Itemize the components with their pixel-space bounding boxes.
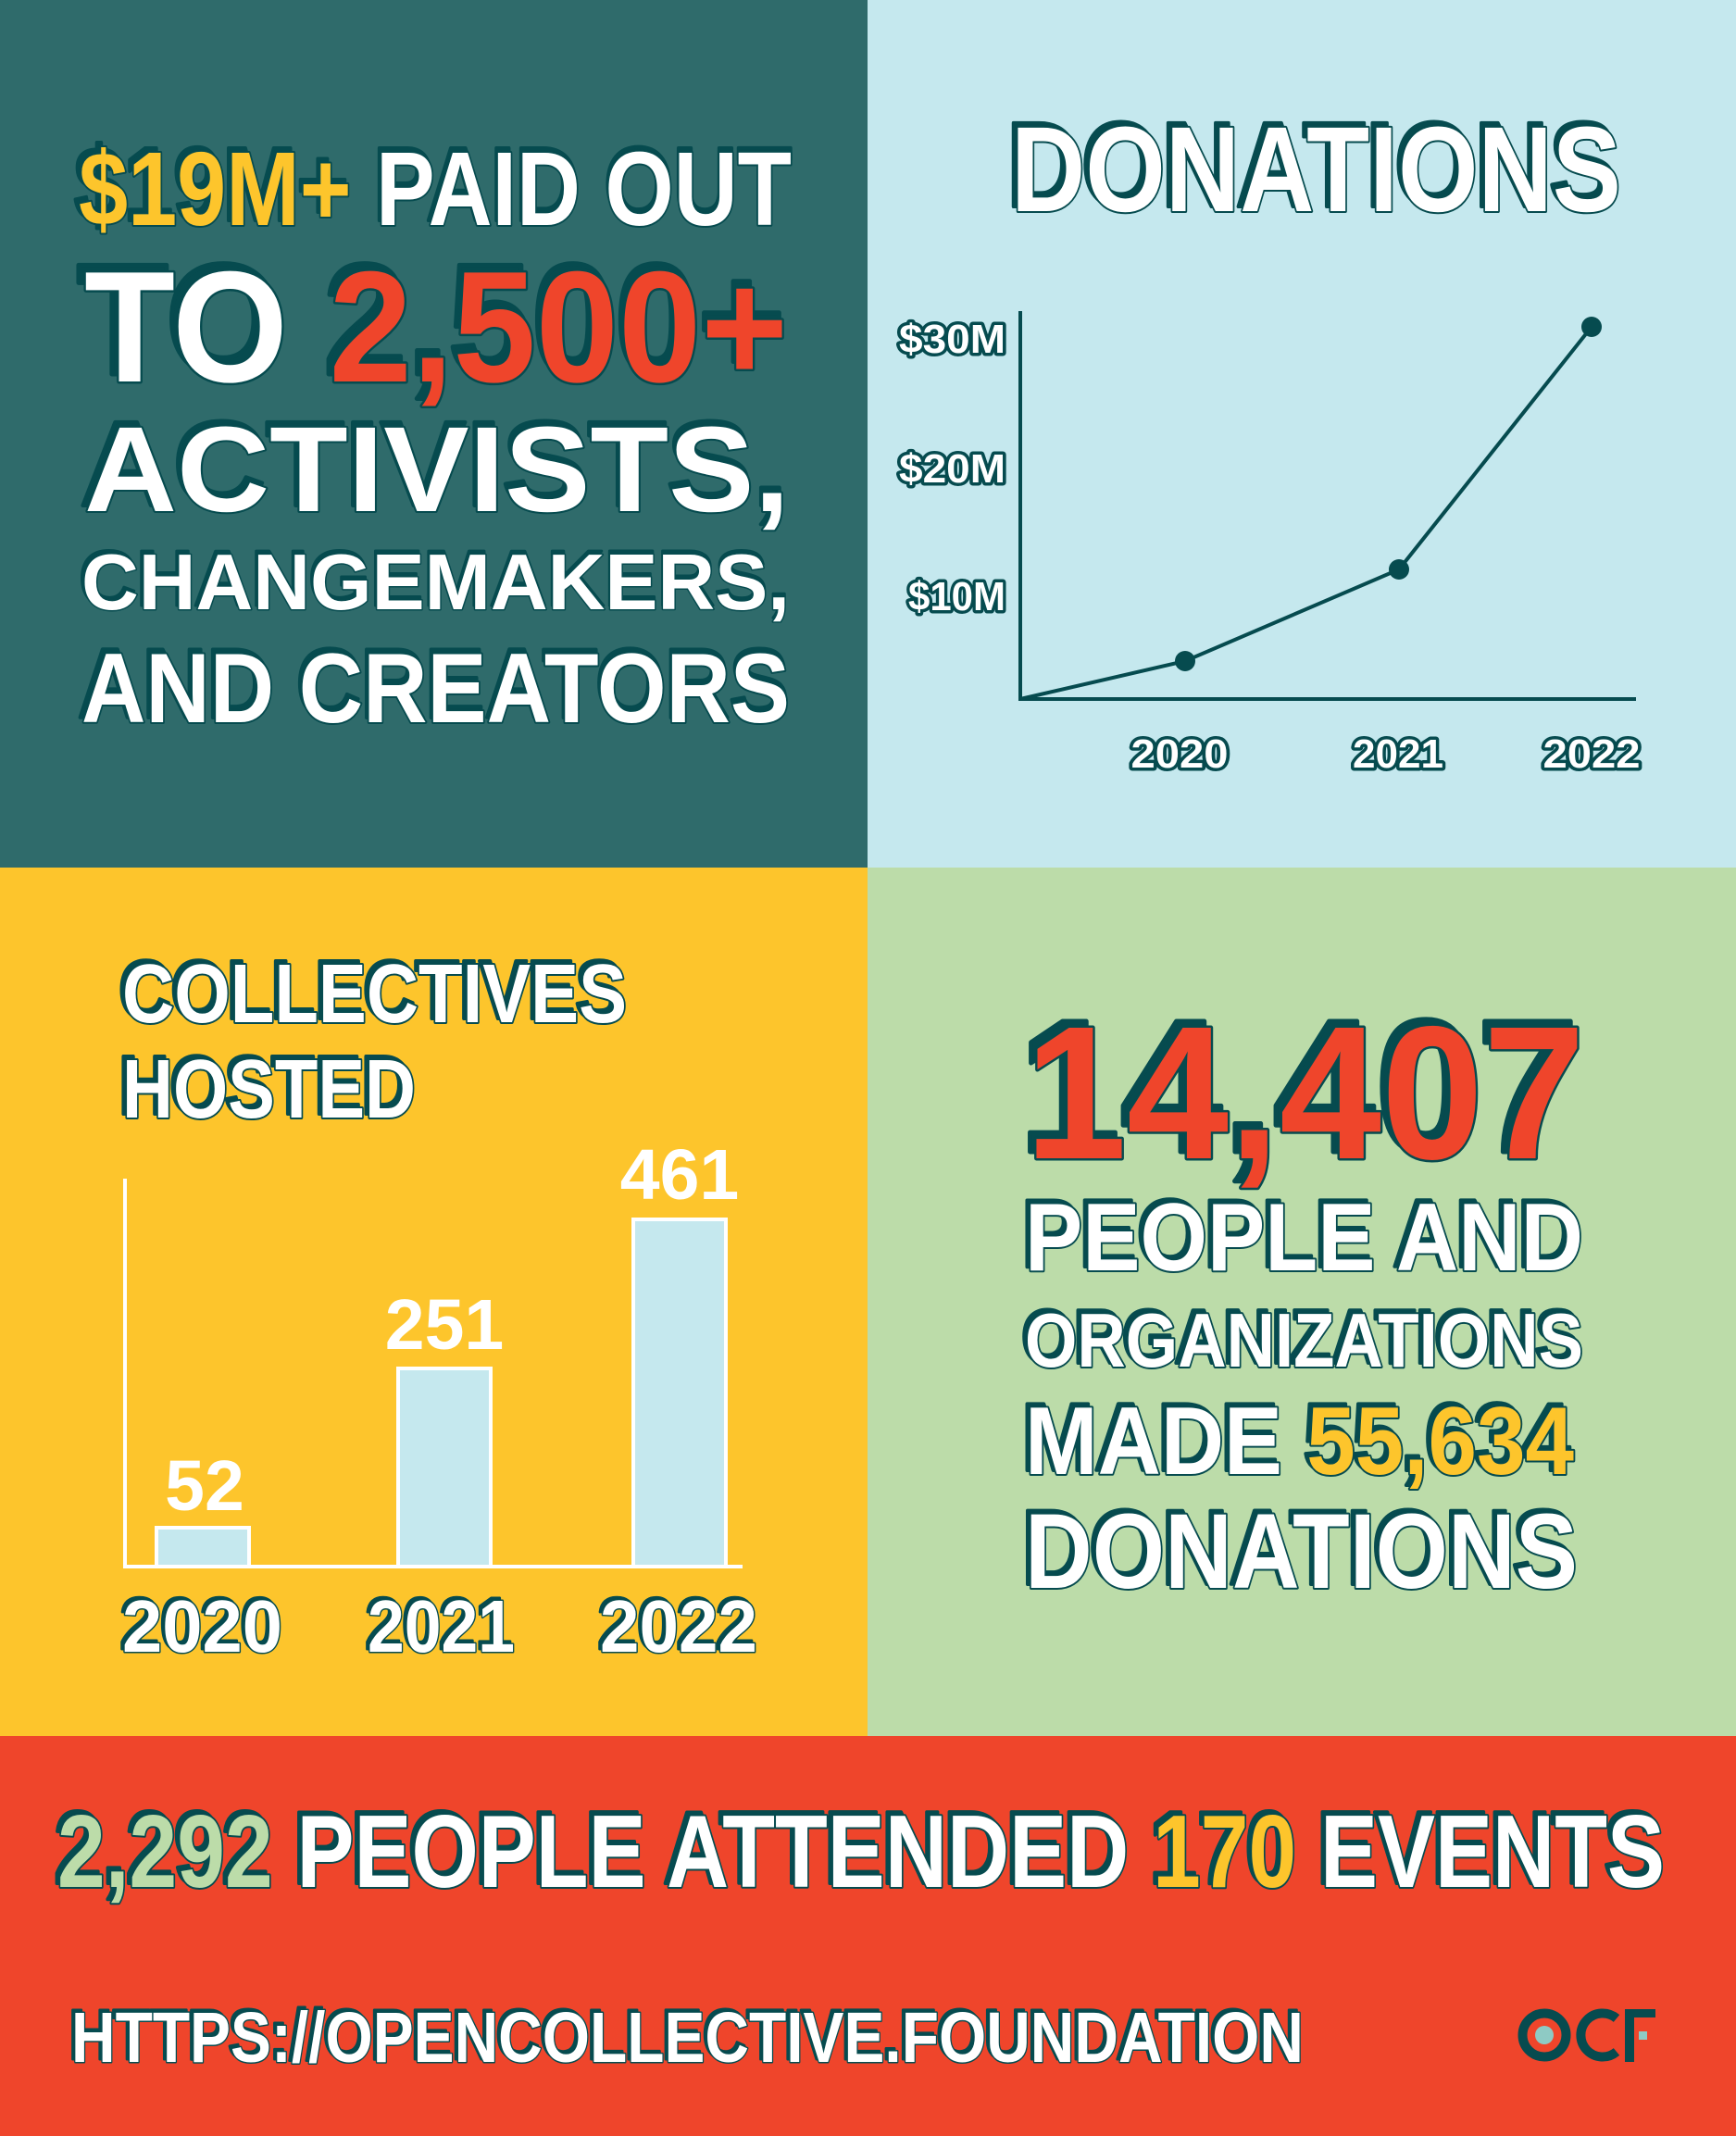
bar chart: collectives: 251 (385, 1285, 504, 1365)
line chart: donations: $30M (899, 317, 1005, 362)
text: people and organizations made donations: PEOPLE AND (1021, 1180, 1580, 1288)
events banner text: 2,292 PEOPLE ATTENDED 170 EVENTS (57, 1794, 1665, 1909)
headline: to 2,500+: TO 2,500+ (77, 231, 785, 408)
headline: to 2,500+: TO 2,500+ (84, 239, 788, 416)
panel: donations chart (868, 0, 1736, 868)
line chart: donations: 2021 (1353, 731, 1443, 777)
title: donations: DONATIONS (1011, 101, 1621, 237)
title: collectives hosted: HOSTED (122, 1043, 416, 1136)
headline: activists: ACTIVISTS, (84, 401, 790, 537)
headline: changemakers: CHANGEMAKERS, (79, 535, 790, 623)
panel: paid out (0, 0, 868, 868)
logo: OCF (1522, 2009, 1655, 2062)
line chart: donations: $20M (899, 446, 1005, 492)
bar chart: collectives: 52 (165, 1446, 244, 1526)
bar chart: collectives: 2022 (597, 1582, 755, 1665)
bar chart: collectives: 2021 (365, 1582, 512, 1665)
bar chart: collectives: 461 (620, 1135, 739, 1215)
title: collectives hosted: HOSTED (119, 1040, 412, 1132)
text: people and organizations made donations: DONATIONS (1025, 1493, 1578, 1611)
big number: 14,407: 14,407 (1025, 987, 1585, 1199)
bar chart: collectives (119, 1135, 757, 1668)
bar chart: collectives: 2020 (122, 1585, 282, 1668)
bar chart: collectives: 2022 (600, 1585, 757, 1668)
text: people and organizations made donations (1021, 1180, 1583, 1611)
title: donations: DONATIONS (1006, 96, 1617, 232)
line chart: donations: $10M (908, 574, 1005, 619)
line chart: donations: 2022 (1542, 731, 1641, 777)
url: HTTPS://OPENCOLLECTIVE.FOUNDATION (69, 1995, 1301, 2075)
title: collectives hosted: COLLECTIVES (119, 944, 623, 1037)
headline: activists: ACTIVISTS, (80, 395, 788, 531)
title: collectives hosted: COLLECTIVES (122, 948, 627, 1041)
line chart: donations (899, 311, 1641, 777)
panel: people and organizations (868, 868, 1736, 1736)
text: people and organizations made donations: PEOPLE AND (1025, 1184, 1583, 1292)
headline: and creators: AND CREATORS (78, 628, 789, 739)
text: people and organizations made donations: MADE 55,634 (1021, 1384, 1570, 1492)
text: people and organizations made donations: DONATIONS (1021, 1489, 1574, 1607)
text: people and organizations made donations: ORGANIZATIONS (1021, 1293, 1580, 1380)
headline: and creators: AND CREATORS (81, 632, 790, 743)
bar chart: collectives: 2020 (119, 1582, 280, 1665)
headline: $19M+ paid out: $19M+ PAID OUT (74, 126, 792, 243)
text: people and organizations made donations: ORGANIZATIONS (1025, 1297, 1583, 1383)
url: HTTPS://OPENCOLLECTIVE.FOUNDATION (71, 1998, 1304, 2078)
line chart: donations: 2020 (1131, 731, 1228, 777)
panel: collectives hosted (0, 868, 868, 1736)
text: people and organizations made donations: MADE 55,634 (1025, 1388, 1574, 1495)
title: collectives hosted (119, 944, 627, 1136)
headline: changemakers: CHANGEMAKERS, (81, 539, 790, 627)
panel: events footer (0, 1736, 1736, 2136)
bar chart: collectives: 2021 (368, 1585, 515, 1668)
big number: 14,407: 14,407 (1018, 981, 1579, 1193)
headline: $19M+ paid out: $19M+ PAID OUT (79, 131, 792, 247)
